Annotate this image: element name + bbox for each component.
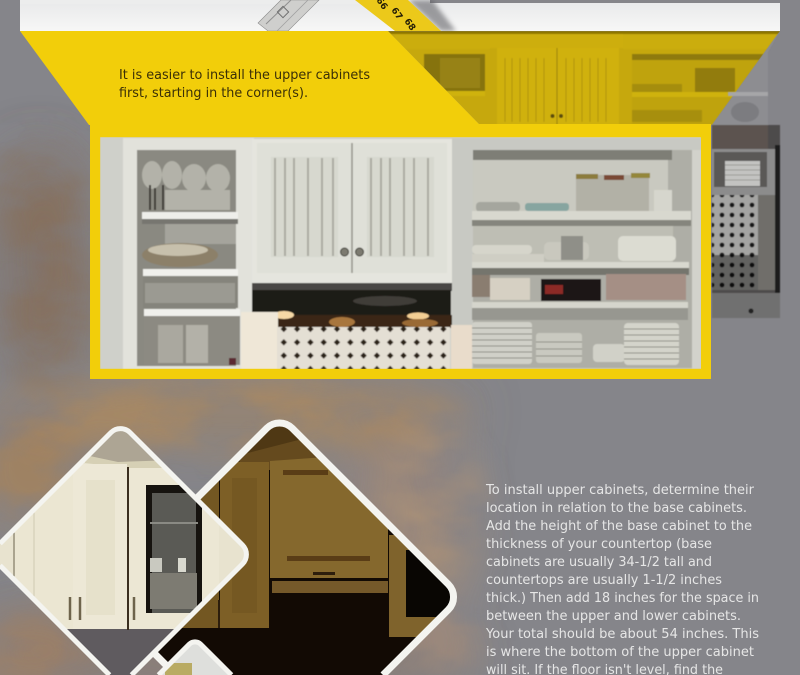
body text: upper cabinet location: Your total should be about 54 inches. This [485, 627, 759, 642]
callout text: first, starting in the corner(s). [119, 86, 308, 101]
icon: white folding ruler [258, 0, 319, 31]
range hood with lights [252, 283, 452, 328]
diamond photo: cream cabinets [0, 425, 250, 675]
body text: upper cabinet location: Add the height of the base cabinet to the [486, 519, 752, 534]
callout text: It is easier to install the upper cabinets [119, 68, 370, 83]
body text: upper cabinet location: thick.) Then add 18 inches for the space in [486, 591, 759, 606]
main kitchen cabinet photo [100, 137, 702, 369]
white header band [20, 0, 780, 31]
yellow photo frame [90, 124, 711, 379]
body text: upper cabinet location: is where the bottom of the upper cabinet [486, 645, 754, 660]
body text: upper cabinet location: countertops are usually 1-1/2 inches [486, 573, 722, 588]
left glass cabinet [123, 138, 254, 369]
icon: yellow tape measure: 67 [389, 6, 404, 22]
grey cabinet photo continuation [712, 31, 780, 318]
diamond photo: lower cabinets in brown [153, 420, 457, 675]
body text: upper cabinet location: thickness of your countertop (base [486, 537, 712, 552]
centre cabinet doors [252, 139, 455, 283]
yellow callout panel [20, 31, 480, 125]
icon: yellow tape measure: 68 [402, 17, 417, 33]
diamond photo: small kitchen detail [155, 638, 235, 675]
yellow tinted cabinet photo [385, 31, 785, 125]
body text: upper cabinet location: cabinets are usually 34-1/2 tall and [486, 555, 712, 570]
body text: upper cabinet location: between the upper and lower cabinets. [486, 609, 741, 624]
icon: yellow tape measure [355, 0, 456, 33]
body text: upper cabinet location: To install upper cabinets, determine their [485, 483, 755, 498]
body text: upper cabinet location: location in relation to the base cabinets. [486, 501, 747, 516]
right open shelves [451, 138, 702, 369]
mosaic tile backsplash [241, 312, 450, 369]
